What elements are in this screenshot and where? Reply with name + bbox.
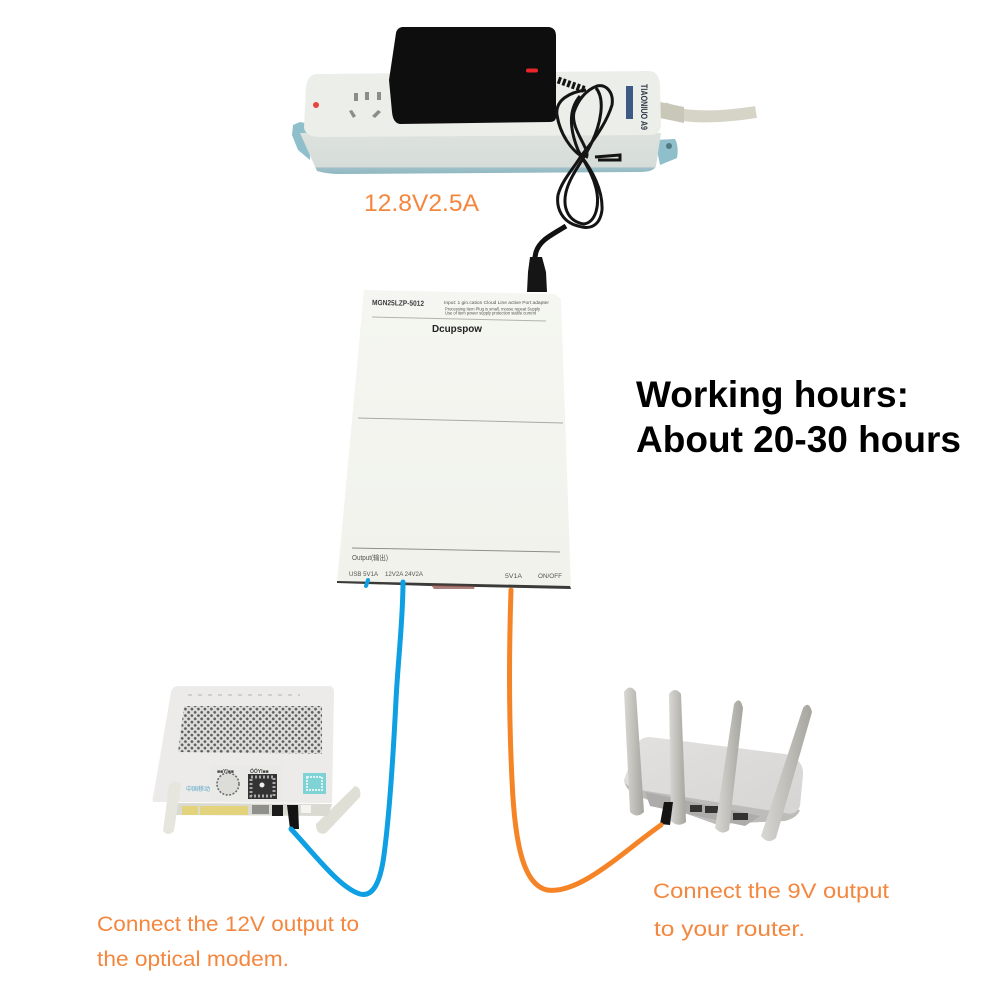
lan ports — [182, 806, 248, 815]
blue 12V cable — [291, 582, 403, 894]
output labels: ON/OFF — [538, 573, 562, 580]
vent dots — [178, 706, 322, 754]
label: modem instruction: Connect the 12V output to — [97, 913, 359, 936]
working hours note: About 20-30 hours — [636, 418, 961, 460]
spec text — [444, 300, 550, 316]
spec text: Use of item power supply protection stable current — [445, 310, 537, 316]
mains cord — [664, 108, 756, 116]
power strip with adapter — [292, 27, 756, 292]
teal qr — [303, 773, 326, 794]
output labels: 5V1A — [505, 573, 523, 580]
output labels — [349, 553, 562, 580]
spec text: Processing Item Plug is small, mouse repeat Supply — [445, 306, 541, 312]
optical modem: ÓÓYI■■ — [250, 767, 269, 775]
orange 9V cable — [510, 590, 661, 890]
label: router instruction — [653, 880, 889, 941]
ethernet ports — [690, 805, 748, 820]
brand: Dcupspow — [432, 323, 483, 335]
power plug — [287, 805, 299, 829]
label: adapter rating: 12.8V2.5A — [364, 190, 479, 217]
label: router instruction: Connect the 9V output — [653, 880, 889, 903]
output labels: Output(输出) — [352, 553, 388, 562]
label: router instruction: to your router. — [654, 918, 805, 941]
indicator light — [313, 102, 319, 108]
front antenna — [163, 781, 181, 834]
status leds — [188, 694, 300, 696]
optical modem — [153, 686, 360, 834]
wifi router — [624, 688, 812, 841]
power plug — [660, 802, 673, 825]
output labels: 12V2A 24V2A — [385, 571, 424, 578]
spec text: Input: 1 gin.cation Cloud Line active Port adapter — [444, 300, 550, 305]
socket — [349, 92, 381, 118]
working hours note — [636, 373, 961, 460]
sticker — [210, 765, 282, 800]
label: modem instruction — [97, 913, 359, 971]
coiled cord — [557, 80, 620, 227]
blue USB marker — [366, 580, 368, 586]
other ports — [252, 805, 269, 814]
output labels: USB 5V1A — [349, 571, 379, 578]
antennas — [624, 688, 812, 841]
router body front — [624, 780, 800, 824]
strip body — [300, 133, 661, 174]
UPS box — [337, 290, 571, 589]
adapter led — [526, 68, 538, 72]
label: modem instruction: the optical modem. — [97, 948, 289, 971]
brand mark: 中国移动 — [186, 785, 210, 793]
adapter — [389, 27, 556, 124]
router body top — [624, 737, 803, 814]
model number: MGN25LZP-5012 — [372, 298, 424, 308]
strip label: TIAONIUO A9 — [639, 84, 649, 130]
working hours note: Working hours: — [636, 373, 909, 415]
qr code — [248, 774, 277, 799]
optical modem: ■■YI■■ — [217, 769, 234, 775]
back antenna — [316, 786, 360, 834]
mounting tabs — [292, 122, 310, 160]
modem body — [153, 686, 334, 803]
